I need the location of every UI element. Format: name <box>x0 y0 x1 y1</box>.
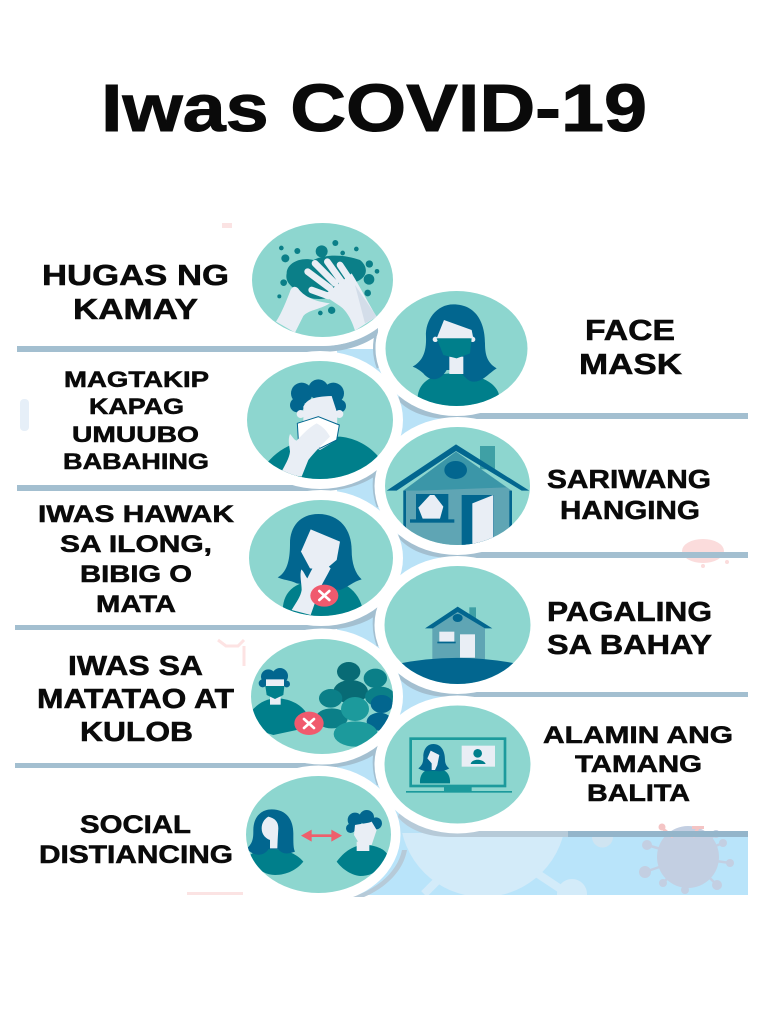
panel: sariwang hanging <box>374 417 711 555</box>
label: sariwang hanging <box>547 464 711 525</box>
panel: alamin ang tamang balita <box>374 696 733 834</box>
icon: small house on hill <box>402 606 514 684</box>
label: iwas sa matatao at kulob <box>37 650 234 747</box>
icon: house with open window <box>387 444 529 550</box>
label: iwas sa matatao at kulob: KULOB <box>80 716 193 747</box>
label: sariwang hanging: SARIWANG <box>547 464 711 494</box>
background: faint pink virus marks <box>20 223 734 895</box>
panel: magtakip kapag umuubo babahing <box>63 351 403 489</box>
label: magtakip kapag umuubo babahing: BABAHING <box>63 449 209 474</box>
label: face mask: MASK <box>579 349 682 381</box>
label: magtakip kapag umuubo babahing: UMUUBO <box>72 422 199 447</box>
panel: social distancing <box>39 766 400 904</box>
divider bars with curved shadows <box>15 328 748 897</box>
label: pagaling sa bahay: SA BAHAY <box>547 629 712 660</box>
label: hugas ng kamay <box>42 260 229 326</box>
panel: face mask <box>376 281 682 416</box>
panel: pagaling sa bahay <box>374 556 712 694</box>
icon: woman touching face <box>278 514 364 620</box>
label: magtakip kapag umuubo babahing <box>63 367 209 474</box>
label: alamin ang tamang balita: BALITA <box>587 780 690 807</box>
icon: news screen <box>406 739 512 793</box>
label: iwas sa matatao at kulob: IWAS SA <box>68 650 203 681</box>
icon: virus <box>639 826 734 894</box>
label: iwas hawak: SA ILONG, <box>60 531 212 558</box>
label: magtakip kapag umuubo babahing: MAGTAKIP <box>64 367 209 392</box>
label: iwas hawak: MATA <box>96 591 176 618</box>
icon: man covering cough <box>268 379 378 479</box>
label: iwas hawak: IWAS HAWAK <box>38 501 234 528</box>
label: pagaling sa bahay: PAGALING <box>547 596 712 627</box>
icon: two people apart <box>247 809 388 876</box>
label: alamin ang tamang balita: ALAMIN ANG <box>543 722 733 749</box>
label: social distiancing: DISTIANCING <box>39 841 233 869</box>
icon: masked man and crowd <box>250 662 395 747</box>
label: face mask <box>579 315 682 381</box>
label: face mask: FACE <box>585 315 675 347</box>
label: social distiancing: SOCIAL <box>80 811 191 839</box>
label: hugas ng kamay: HUGAS NG <box>42 260 229 292</box>
label: iwas hawak: BIBIG O <box>80 561 192 588</box>
label: social distiancing <box>39 811 233 869</box>
panel: iwas hawak sa ilong, bibig o mata <box>38 490 403 626</box>
label: sariwang hanging: HANGING <box>560 495 700 525</box>
background band: light blue with virus <box>337 349 748 909</box>
label: iwas sa matatao at kulob: MATATAO AT <box>37 683 234 714</box>
label: pagaling sa bahay <box>547 596 712 660</box>
panel: iwas sa matatao at kulob <box>37 628 403 764</box>
title: Iwas COVID-19 <box>101 71 647 146</box>
icon: woman with mask <box>413 304 499 413</box>
label: alamin ang tamang balita <box>543 722 733 807</box>
label: iwas hawak <box>38 501 234 618</box>
label: magtakip kapag umuubo babahing: KAPAG <box>89 394 184 419</box>
panel: hugas ng kamay <box>42 214 402 346</box>
label: hugas ng kamay: KAMAY <box>73 294 198 326</box>
icon: washing hands <box>276 240 379 333</box>
label: alamin ang tamang balita: TAMANG <box>575 751 702 778</box>
